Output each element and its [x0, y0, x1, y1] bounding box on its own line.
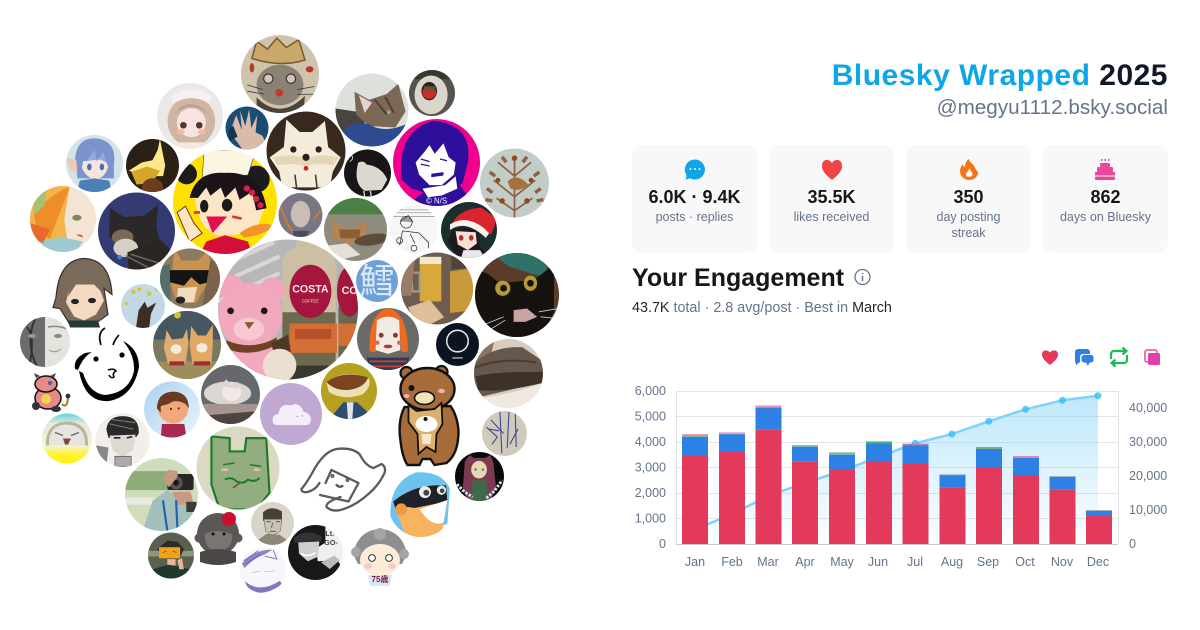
avatar: blue kanji tile: 鱈	[359, 263, 395, 302]
left axis labels: 2,000	[635, 486, 666, 500]
left axis labels: 5,000	[635, 410, 666, 424]
stat card: days on Bluesky: days on Bluesky	[1060, 210, 1152, 224]
avatar: pink bear and Costa bottles	[217, 240, 362, 385]
title: Bluesky Wrapped 2025: Bluesky Wrapped 2025	[832, 59, 1168, 92]
bar: Apr	[792, 445, 818, 544]
bar: Dec	[1086, 510, 1112, 544]
bar: May	[829, 452, 855, 544]
heading: Your Engagement: Your Engagement	[632, 264, 845, 292]
stat card: likes: likes received	[794, 210, 869, 224]
legend icons	[1042, 348, 1160, 366]
avatar: pink bear and Costa bottles: CO	[342, 285, 358, 297]
avatar: pilot comic	[288, 525, 343, 580]
stacked bars	[682, 405, 1112, 544]
cumulative area	[694, 396, 1098, 544]
legend: reposts	[1111, 348, 1127, 366]
avatar: bear holding dog	[400, 366, 458, 465]
stat card: likes	[769, 145, 894, 253]
cumulative points	[838, 392, 1102, 474]
month labels	[685, 555, 1109, 569]
avatar cluster	[20, 35, 559, 593]
avatar: line-drawn person sketch	[390, 205, 438, 253]
cumulative line	[694, 396, 1098, 530]
right axis labels	[1129, 401, 1167, 551]
left axis labels: 6,000	[635, 384, 666, 398]
avatar: white fluffy cat	[201, 365, 260, 424]
avatar: monochrome man sketch	[96, 413, 150, 467]
bar: Mar	[756, 405, 782, 544]
month labels: Nov	[1051, 555, 1074, 569]
stat card: days on Bluesky	[1043, 145, 1168, 253]
avatar: pencil man portrait	[251, 502, 294, 545]
avatar: pink bear and Costa bottles: COSTA	[292, 284, 329, 296]
month labels: May	[830, 555, 855, 569]
avatar: white fluffy dog	[266, 112, 346, 190]
stat card: likes: 35.5K	[807, 187, 856, 207]
avatar: small fluffy grey cat	[278, 193, 322, 237]
avatar: crowned cat	[241, 35, 319, 113]
stat card: streak	[906, 145, 1031, 253]
right axis labels: 30,000	[1129, 435, 1167, 449]
handle: @megyu1112.bsky.social	[937, 96, 1168, 119]
avatar: pink bear and Costa bottles: COFFEE	[302, 299, 319, 304]
avatar: dark ring	[436, 323, 479, 366]
avatar: shiba with sunglasses	[160, 248, 220, 308]
avatar: golden light in dark	[126, 139, 179, 197]
avatar: plate with tree and bird	[480, 148, 549, 218]
avatar: santa anime girl	[441, 202, 497, 258]
avatar: owl on yellow	[42, 414, 92, 464]
month labels: Sep	[977, 555, 999, 569]
engagement chart	[635, 384, 1167, 569]
left axis labels	[635, 384, 666, 551]
avatar: beer glasses	[401, 252, 473, 324]
gridlines and axes	[676, 391, 1118, 544]
left axis labels: 3,000	[635, 460, 666, 474]
right axis labels: 40,000	[1129, 401, 1167, 415]
avatar: lilac cloud	[260, 383, 322, 445]
month labels: Mar	[757, 555, 779, 569]
avatar: yellow girl with buns	[173, 150, 277, 254]
avatar: hooded girl text	[455, 452, 504, 501]
avatar: ink line face	[75, 328, 139, 401]
engagement summary line: 43.7K total · 2.8 avg/post · Best in March	[632, 300, 892, 316]
avatar: black cat with tongue	[475, 253, 559, 337]
avatar: pie-head man painting	[321, 363, 377, 419]
avatar: brown-haired chibi	[53, 258, 112, 328]
stat card: streak: 350	[953, 187, 984, 207]
icon: birthday cake	[1095, 159, 1115, 180]
avatar: green rabbit bun	[196, 426, 280, 510]
icon: speech bubble	[685, 159, 705, 180]
left axis labels: 0	[659, 537, 666, 551]
left axis labels: 1,000	[635, 512, 666, 526]
avatar: grey-haired granny: 75歳	[372, 574, 388, 584]
avatar: brown cat curled	[474, 339, 543, 408]
avatar: corgis	[153, 311, 221, 379]
avatar: strawberry in white	[409, 70, 455, 116]
legend: likes	[1042, 350, 1058, 365]
avatar: gorilla with red flower	[194, 512, 242, 565]
avatar: photographer	[125, 458, 198, 531]
month labels: Aug	[941, 555, 963, 569]
right axis labels: 20,000	[1129, 469, 1167, 483]
avatar: hooded anime girl	[157, 83, 223, 149]
icon: heart	[822, 160, 842, 180]
avatar: tabby cat on sofa	[336, 74, 408, 146]
stat card: posts and replies: 6.0K · 9.4K	[648, 187, 741, 207]
avatar: fox on rock	[324, 198, 390, 261]
avatar: blue-haired anime	[66, 135, 123, 192]
icon: info	[855, 270, 870, 284]
month labels: Dec	[1087, 555, 1109, 569]
avatar: dark cat on navy	[98, 192, 175, 270]
avatar: purple brush sketch	[240, 547, 286, 593]
avatar: yellow flowers and branch	[121, 284, 165, 328]
stat card: streak: day posting	[937, 210, 1001, 224]
avatar: line ghost	[302, 449, 385, 511]
bar: Sep	[976, 447, 1002, 544]
avatar: white bird on black	[344, 150, 391, 196]
stat card: days on Bluesky: 862	[1090, 187, 1121, 207]
bar: Oct	[1013, 456, 1039, 544]
bar: Feb	[719, 432, 745, 544]
bar: Jan	[682, 434, 708, 544]
avatar: magenta anime N/S: © N/S	[426, 196, 447, 205]
avatar: pilot comic: GO-	[324, 539, 338, 547]
legend: quotes	[1145, 350, 1160, 365]
icon: flame	[960, 159, 978, 180]
bar: Jul	[902, 444, 928, 544]
stat card: posts and replies	[632, 145, 757, 253]
stat card: streak: streak	[951, 226, 986, 240]
right axis labels: 0	[1129, 537, 1136, 551]
avatar: hand on blue	[226, 106, 268, 150]
avatar: red-orange haired girl	[357, 308, 419, 370]
bar: Jun	[866, 442, 892, 544]
title	[832, 59, 1168, 119]
left axis labels: 4,000	[635, 435, 666, 449]
avatar: man with orange mask	[148, 532, 194, 578]
avatar: pixel cow	[32, 373, 70, 412]
month labels: Apr	[795, 555, 815, 569]
month labels: Feb	[721, 555, 743, 569]
bar: Nov	[1050, 476, 1076, 544]
avatar: orange masked duck	[390, 472, 450, 538]
bar: Aug	[940, 474, 966, 544]
legend: replies	[1075, 349, 1094, 366]
month labels: Jun	[868, 555, 888, 569]
avatar: pilot comic: Lt.	[325, 530, 334, 538]
month labels: Jul	[907, 555, 923, 569]
avatar: half-face sketch	[20, 317, 70, 367]
month labels: Jan	[685, 555, 705, 569]
avatar: magenta anime N/S	[393, 119, 480, 206]
avatar: orange watercolor face	[30, 186, 96, 252]
avatar: ink sketch grey	[482, 411, 527, 456]
right axis labels: 10,000	[1129, 503, 1167, 517]
avatar: cartoon boy on blue	[144, 382, 200, 438]
stat card: posts and replies: posts · replies	[656, 210, 733, 224]
avatar: grey-haired granny	[351, 528, 409, 586]
month labels: Oct	[1015, 555, 1035, 569]
